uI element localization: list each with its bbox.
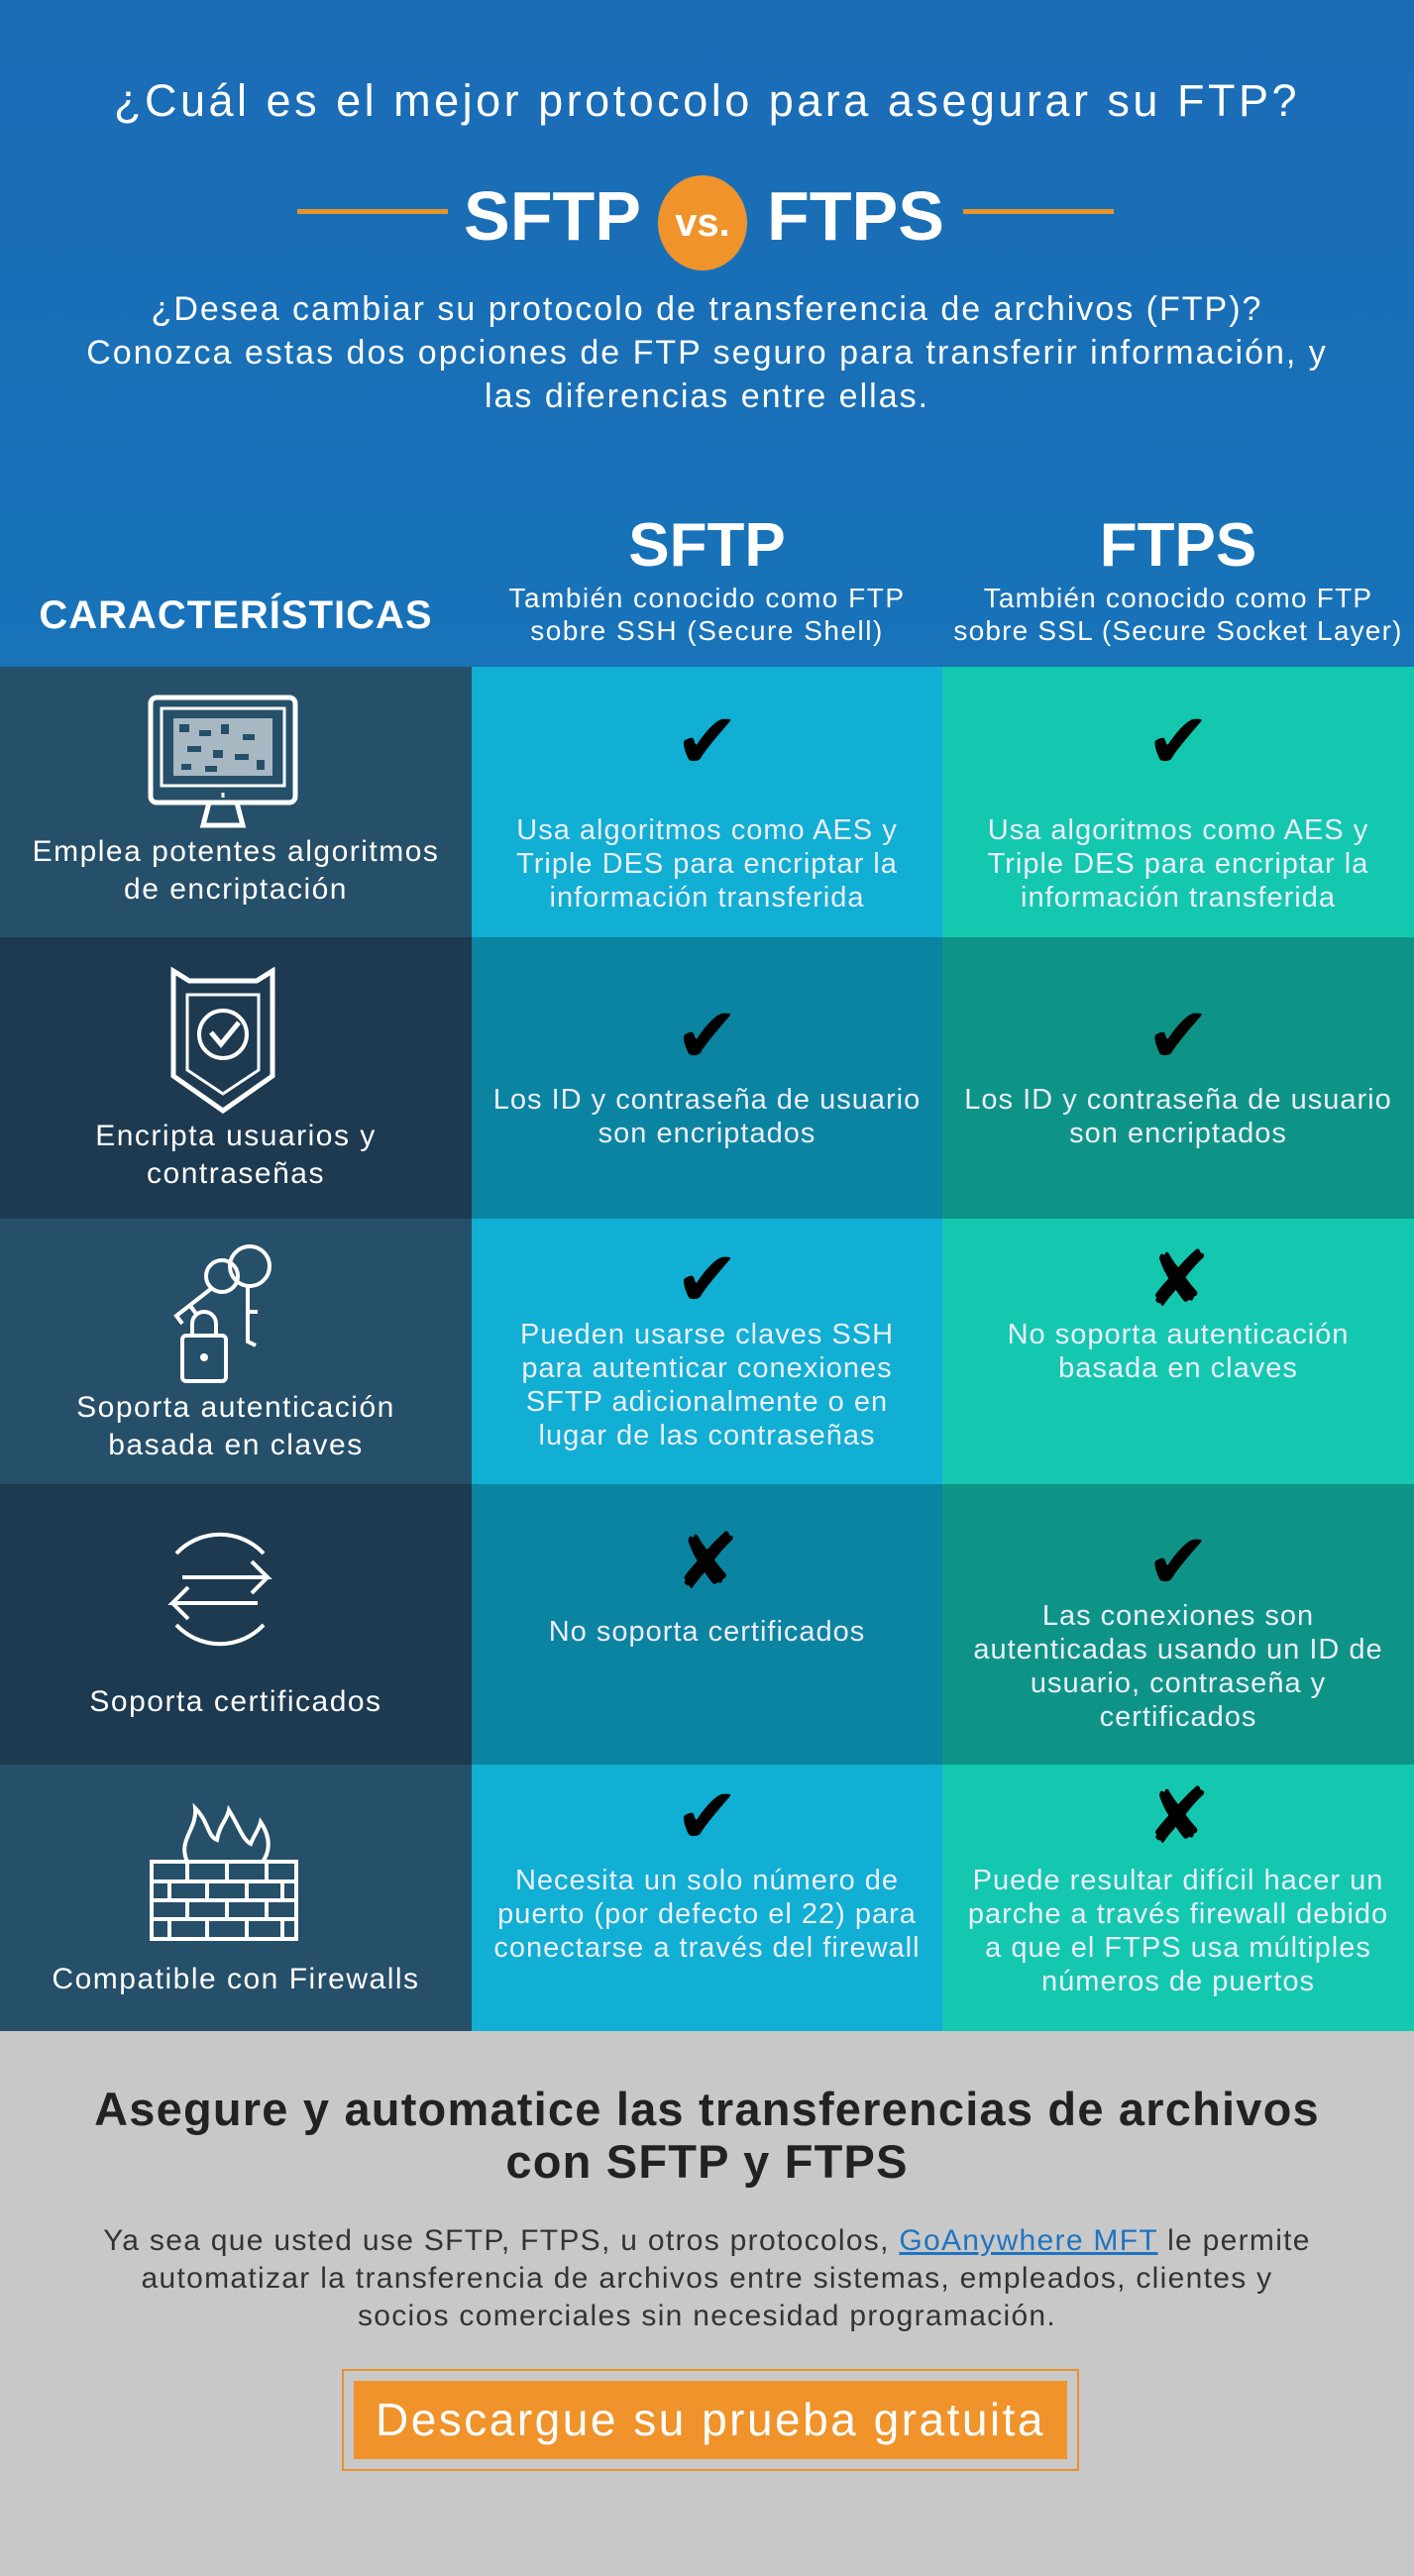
cell: SFTP 1 xyxy=(472,667,942,937)
cell: FTPS 4: certificados xyxy=(1100,1701,1256,1733)
cell: FTPS 1: ✔ xyxy=(1145,698,1211,787)
cell: SFTP 3: para autenticar conexiones xyxy=(521,1352,893,1384)
cell: SFTP 3: Pueden usarse claves SSH xyxy=(520,1319,894,1350)
cell: SFTP 4 xyxy=(472,1484,942,1765)
cell: FTPS 5: ✘ xyxy=(1145,1772,1211,1862)
row 5: firewalls xyxy=(0,1765,1414,2031)
heading: SFTP: También conocido como FTP xyxy=(508,583,906,613)
intro text: ¿Desea cambiar su protocolo de transferencia de archivos (FTP)? xyxy=(152,290,1262,328)
cell: FTPS 1: Usa algoritmos como AES y xyxy=(988,814,1368,846)
cell: FTPS 3 xyxy=(942,1219,1414,1484)
SFTP vs FTPS banner: SFTP xyxy=(464,177,641,255)
label xyxy=(76,1391,395,1461)
cell: FTPS 4 xyxy=(942,1484,1414,1765)
cell: SFTP 3: SFTP adicionalmente o en xyxy=(526,1386,888,1418)
cell: FTPS 5 xyxy=(942,1765,1414,2031)
intro text xyxy=(86,290,1328,415)
bottom heading: Asegure y automatice las transferencias de archivos xyxy=(94,2083,1320,2135)
cell: FTPS 4: autenticadas usando un ID de xyxy=(973,1634,1383,1665)
bottom paragraph: Ya sea que usted use SFTP, FTPS, u otros protocolos, GoAnywhere MFT le permite xyxy=(103,2224,1311,2257)
heading: FTPS: También conocido como FTP xyxy=(984,583,1372,613)
heading: SFTP: SFTP xyxy=(628,511,786,580)
label xyxy=(33,835,439,906)
cell: SFTP 3: lugar de las contraseñas xyxy=(539,1420,875,1451)
bottom heading: con SFTP y FTPS xyxy=(505,2135,909,2188)
cell: SFTP 2: son encriptados xyxy=(598,1118,816,1149)
button xyxy=(342,2369,1079,2471)
row 4: certificados xyxy=(0,1484,1414,1765)
row 2: usuarios xyxy=(0,937,1414,1219)
cell: SFTP 2: Los ID y contraseña de usuario xyxy=(493,1084,921,1116)
label: de encriptación xyxy=(124,873,348,906)
SFTP vs FTPS banner: vs. xyxy=(675,201,730,245)
cell: SFTP 3: ✔ xyxy=(675,1235,739,1325)
bottom heading xyxy=(94,2083,1320,2188)
label: Emplea potentes algoritmos xyxy=(33,835,439,868)
cell: FTPS 2 xyxy=(942,937,1414,1219)
SFTP vs FTPS banner xyxy=(297,175,1114,270)
icon: keys and lock xyxy=(173,1244,272,1383)
cell: SFTP 1: Usa algoritmos como AES y xyxy=(516,814,898,846)
cell: SFTP 5: conectarse a través del firewall xyxy=(493,1932,921,1964)
cell: FTPS 2: ✔ xyxy=(1145,992,1211,1081)
cell: FTPS 5: parche a través firewall debido xyxy=(968,1898,1388,1930)
label xyxy=(95,1120,377,1190)
cell: FTPS 3: basada en claves xyxy=(1058,1352,1298,1384)
cell: FTPS 3: ✘ xyxy=(1145,1235,1211,1325)
cell: SFTP 1: Triple DES para encriptar la xyxy=(516,848,898,880)
cell: feature 5 xyxy=(0,1765,472,2031)
bottom paragraph: automatizar la transferencia de archivos entre sistemas, empleados, clientes y xyxy=(142,2262,1272,2295)
cell: SFTP 5 xyxy=(472,1765,942,2031)
cell: SFTP 2: ✔ xyxy=(675,992,739,1081)
cell: SFTP 5: Necesita un solo número de xyxy=(515,1865,899,1896)
cell: SFTP 3 xyxy=(472,1219,942,1484)
cell: FTPS 4: Las conexiones son xyxy=(1042,1600,1314,1632)
bottom section xyxy=(0,2031,1414,2576)
heading: SFTP xyxy=(508,511,906,646)
cell: FTPS 5: a que el FTPS usa múltiples xyxy=(985,1932,1371,1964)
cell: SFTP 5: ✔ xyxy=(675,1772,739,1862)
intro text: Conozca estas dos opciones de FTP seguro para transferir información, y xyxy=(86,334,1328,372)
label: contraseñas xyxy=(147,1157,325,1190)
icon: firewall xyxy=(150,1803,298,1941)
heading: caracteristicas: CARACTERÍSTICAS xyxy=(39,593,433,637)
cell: SFTP 4: No soporta certificados xyxy=(549,1616,865,1648)
label: Encripta usuarios y xyxy=(95,1120,377,1152)
label: Soporta certificados xyxy=(89,1685,382,1718)
cell: feature 2 xyxy=(0,937,472,1219)
icon: shield xyxy=(170,967,275,1114)
heading: FTPS: FTPS xyxy=(1100,511,1256,580)
bottom paragraph xyxy=(103,2224,1311,2332)
label: basada en claves xyxy=(108,1429,364,1461)
cell: SFTP 1: ✔ xyxy=(675,698,739,787)
title: ¿Cuál es el mejor protocolo para asegurar su FTP? xyxy=(114,75,1300,126)
bottom paragraph: socios comerciales sin necesidad programación. xyxy=(358,2300,1056,2332)
icon: circular arrows xyxy=(167,1532,272,1647)
cell: FTPS 2: Los ID y contraseña de usuario xyxy=(964,1084,1392,1116)
cell: feature 4 xyxy=(0,1484,472,1765)
heading: FTPS xyxy=(953,511,1403,646)
cell: SFTP 4: ✘ xyxy=(675,1518,739,1607)
heading: SFTP: sobre SSH (Secure Shell) xyxy=(530,615,884,646)
cell: FTPS 5: números de puertos xyxy=(1041,1966,1315,1997)
button: Descargue su prueba gratuita xyxy=(376,2394,1045,2445)
cell: FTPS 1: Triple DES para encriptar la xyxy=(988,848,1368,880)
cell: FTPS 4: ✔ xyxy=(1145,1518,1211,1607)
header background xyxy=(0,0,1414,667)
cell: SFTP 1: información transferida xyxy=(549,882,864,913)
cell: FTPS 4: usuario, contraseña y xyxy=(1031,1667,1326,1699)
intro text: las diferencias entre ellas. xyxy=(485,377,929,415)
label: Soporta autenticación xyxy=(76,1391,395,1424)
heading: FTPS: sobre SSL (Secure Socket Layer) xyxy=(953,615,1403,646)
row 1: encriptacion xyxy=(0,667,1414,937)
cell: FTPS 5: Puede resultar difícil hacer un xyxy=(973,1865,1383,1896)
cell: FTPS 3: No soporta autenticación xyxy=(1008,1319,1349,1350)
cell: FTPS 2: son encriptados xyxy=(1069,1118,1287,1149)
cell: FTPS 1: información transferida xyxy=(1021,882,1336,913)
cell: feature 3 xyxy=(0,1219,472,1484)
row 3: claves xyxy=(0,1219,1414,1484)
icon: monitor xyxy=(149,696,297,828)
cell: SFTP 2 xyxy=(472,937,942,1219)
cell: feature 1 xyxy=(0,667,472,937)
SFTP vs FTPS banner: FTPS xyxy=(767,177,944,255)
cell: FTPS 1 xyxy=(942,667,1414,937)
label: Compatible con Firewalls xyxy=(52,1963,420,1995)
cell: SFTP 5: puerto (por defecto el 22) para xyxy=(497,1898,917,1930)
